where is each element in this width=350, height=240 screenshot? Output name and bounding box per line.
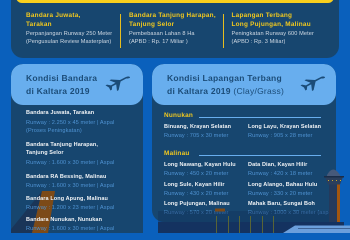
terminal silhouette [158, 208, 344, 233]
region: malinau: Mahak Baru, Sungai Boh [248, 201, 315, 207]
region: malinau: Malinau [164, 150, 190, 156]
header: kondisi bandara [11, 64, 143, 105]
text: Lapangan Terbang Long Pujungan [232, 12, 314, 45]
text: Bandara Juwata: Perpanjangan Runway 250 Meter [26, 30, 112, 36]
list: airports: Bandara Tanjung Harapan, [26, 142, 98, 148]
list: airports: Tanjung Selor [26, 150, 64, 156]
text: Bandara Tanjung Harapan: (APBD : Rp. 17 Miliar ) [129, 39, 188, 45]
text: Bandara Tanjung Harapan: Bandara Tanjung Harapan, [129, 12, 216, 19]
text: Bandara Tanjung Harapan: Tanjung Selor [129, 21, 174, 28]
region: nunukan: Nunukan [164, 112, 193, 118]
region: nunukan: Runway : 705 x 30 meter [164, 133, 228, 139]
text: Bandara Juwata: Bandara Juwata, [26, 12, 81, 19]
text: Bandara Tanjung Harapan [129, 12, 216, 45]
icon: airplane [106, 76, 130, 91]
header: kondisi bandara: Kondisi Bandara [26, 73, 97, 83]
text: Bandara Juwata: Tarakan [26, 21, 52, 28]
panel: kondisi bandara [11, 64, 143, 233]
text: Lapangan Terbang Long Pujungan: Long Pujungan, Malinau [232, 21, 311, 28]
header: kondisi bandara: di Kaltara 2019 [26, 86, 90, 96]
region: nunukan: Runway : 905 x 28 meter [248, 133, 312, 139]
region: malinau: Long Pujungan, Malinau [164, 201, 230, 207]
list: airports: Runway : 1.600 x 30 meter | Aspal [26, 226, 114, 232]
control tower [324, 170, 344, 222]
region: malinau: Data Dian, Kayan Hilir [248, 162, 307, 168]
runway [283, 226, 350, 233]
decorative stripes [11, 191, 55, 233]
region: malinau [164, 150, 335, 216]
yellow top band [16, 0, 334, 2]
region: nunukan [164, 112, 321, 139]
header: kondisi lapangan terbang [152, 64, 336, 105]
text: Bandara Juwata [26, 12, 112, 45]
text: Bandara Tanjung Harapan: Pembebasan Lahan 8 Ha [129, 30, 195, 36]
region: malinau: Runway : 330 x 20 meter [248, 190, 312, 196]
region: malinau: Runway : 450 x 20 meter [164, 171, 228, 177]
divider 1 [120, 14, 121, 48]
list: airports: (Proses Peningkatan) [26, 128, 82, 134]
region: malinau: Long Nawang, Kayan Hulu [164, 162, 236, 168]
list: airports: Runway : 2.250 x 45 meter | Aspal [26, 120, 114, 126]
list: airports: Bandara Juwata, Tarakan [26, 110, 94, 116]
region: malinau: Long Alango, Bahau Hulu [248, 182, 317, 188]
list: airports: Bandara RA Bessing, Malinau [26, 174, 106, 180]
region: malinau: Runway : 570 x 20 meter [164, 210, 228, 216]
text: Lapangan Terbang Long Pujungan: (APBD : Rp. 3 Miliar) [232, 39, 286, 45]
list: airports: Bandara Long Apung, Malinau [26, 196, 108, 202]
divider 2 [223, 14, 224, 48]
text: Lapangan Terbang Long Pujungan: Lapangan Terbang [232, 12, 292, 19]
panel: kondisi lapangan terbang [152, 64, 336, 222]
list: airports [26, 110, 114, 232]
panel: planned development [11, 0, 339, 58]
list: airports: Bandara Nunukan, Nunukan [26, 217, 102, 223]
region: malinau: Runway : 430 x 20 meter [164, 190, 228, 196]
list: airports: Runway : 1.600 x 30 meter | Aspal [26, 160, 114, 166]
region: nunukan: Binuang, Krayan Selatan [164, 124, 231, 130]
region: malinau: Runway : 420 x 18 meter [248, 171, 312, 177]
region: malinau: Long Sule, Kayan Hilir [164, 182, 225, 188]
icon: airplane [300, 76, 325, 91]
region: malinau: Runway : 1000 x 30 meter (aspal) [248, 210, 335, 216]
header: kondisi lapangan terbang: di Kaltara 2019 (Clay/Grass) [167, 86, 284, 96]
list: airports: Runway : 1.200 x 23 meter | Aspal [26, 205, 114, 211]
list: airports: Runway : 1.600 x 30 meter | Aspal [26, 183, 114, 189]
text: Bandara Juwata: (Pengusulan Review Masterplan) [26, 39, 111, 45]
header: kondisi lapangan terbang: Kondisi Lapangan Terbang [167, 73, 282, 83]
region: nunukan: Long Layu, Krayan Selatan [248, 124, 321, 130]
text: Lapangan Terbang Long Pujungan: Peningkatan Runway 600 Meter [232, 30, 314, 36]
